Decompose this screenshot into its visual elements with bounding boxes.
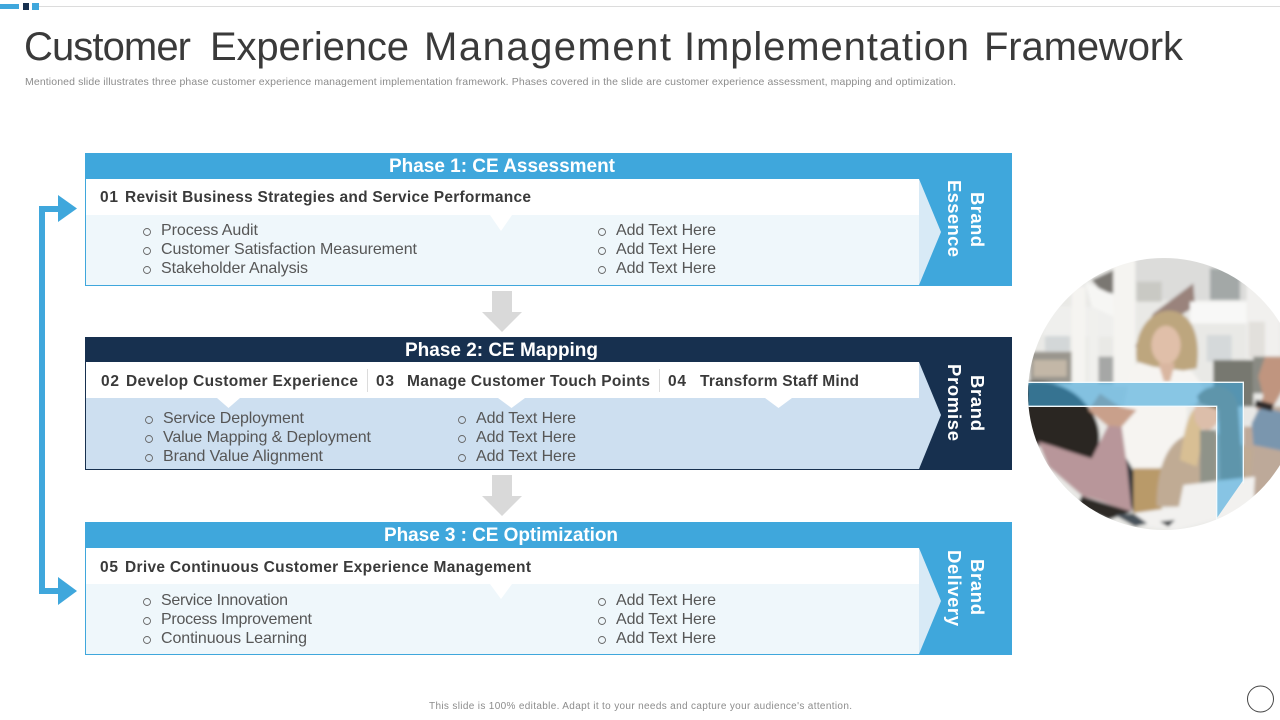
side label: brand essence: Essence bbox=[944, 180, 965, 257]
heading: phase 2: Phase 2: CE Mapping bbox=[405, 340, 598, 361]
side label: brand delivery: Delivery bbox=[944, 550, 965, 627]
title: Implementation bbox=[684, 25, 969, 69]
list: phase 1 right: Add Text Here bbox=[616, 241, 716, 258]
side label: brand promise: Brand bbox=[967, 375, 988, 431]
arrow: phase 2 to phase 3 bbox=[482, 475, 522, 516]
title bbox=[24, 25, 1184, 69]
list: phase 2 right: Add Text Here bbox=[476, 448, 576, 465]
step 04 heading: 04 bbox=[668, 373, 686, 390]
step 01 heading: 01 bbox=[100, 189, 118, 206]
title: Framework bbox=[984, 25, 1184, 69]
list: phase 1 left: Process Audit bbox=[161, 222, 259, 239]
list: phase 2 left bbox=[146, 410, 372, 465]
title: Customer bbox=[24, 25, 191, 69]
heading: phase 1: Phase 1: CE Assessment bbox=[389, 156, 616, 177]
list: phase 1 right bbox=[598, 222, 716, 277]
list: phase 2 left: Service Deployment bbox=[163, 410, 305, 427]
photo: team in circular crop bbox=[1020, 250, 1280, 537]
panel: phase 2 bbox=[86, 338, 1012, 470]
side label: brand promise: Promise bbox=[944, 364, 965, 441]
list: phase 3 left: Service Innovation bbox=[161, 592, 288, 609]
list: phase 1 left bbox=[144, 222, 418, 277]
list: phase 3 right: Add Text Here bbox=[616, 592, 716, 609]
list: phase 2 left: Value Mapping & Deployment bbox=[163, 429, 372, 446]
title: Management bbox=[424, 25, 671, 69]
step 04 heading: Transform Staff Mind bbox=[700, 373, 859, 390]
list: phase 3 left bbox=[144, 592, 313, 647]
footer note: This slide is 100% editable. Adapt it to your needs and capture your audience's attention. bbox=[429, 701, 852, 712]
list: phase 3 right: Add Text Here bbox=[616, 611, 716, 628]
step 05 heading: Drive Continuous Customer Experience Management bbox=[125, 559, 531, 576]
list: phase 3 left: Continuous Learning bbox=[161, 630, 307, 647]
list: phase 3 right: Add Text Here bbox=[616, 630, 716, 647]
side label: brand delivery: Brand bbox=[967, 559, 988, 615]
subtitle: Mentioned slide illustrates three phase customer experience management implementation framework. Phases covered in the slide are customer experience assessment, mapping and optimization. bbox=[25, 76, 956, 88]
presenter bbox=[1122, 364, 1198, 468]
top decoration bbox=[0, 3, 1280, 10]
list: phase 1 right: Add Text Here bbox=[616, 260, 716, 277]
right arm bbox=[1252, 407, 1280, 452]
panel: phase 3 bbox=[86, 522, 1012, 654]
step 03 heading: 03 bbox=[376, 373, 394, 390]
feedback loop arrow bbox=[39, 195, 77, 605]
list: phase 3 right bbox=[598, 592, 716, 647]
white frame lines bbox=[1028, 382, 1243, 483]
list: phase 2 right: Add Text Here bbox=[476, 410, 576, 427]
step 01 heading: Revisit Business Strategies and Service Performance bbox=[125, 189, 531, 206]
step 03 heading: Manage Customer Touch Points bbox=[407, 373, 650, 390]
seated woman bbox=[1157, 433, 1253, 507]
step 05 heading: 05 bbox=[100, 559, 118, 576]
page indicator circle bbox=[1248, 686, 1274, 712]
list: phase 1 left: Customer Satisfaction Measurement bbox=[161, 241, 418, 258]
panel: phase 1 bbox=[86, 154, 1012, 286]
list: phase 2 right: Add Text Here bbox=[476, 429, 576, 446]
side label: brand essence bbox=[944, 180, 988, 257]
title: Experience bbox=[210, 25, 409, 69]
left woman bbox=[1020, 381, 1099, 463]
heading: phase 3: Phase 3 : CE Optimization bbox=[384, 525, 618, 546]
step 02 heading: Develop Customer Experience bbox=[126, 373, 358, 390]
step 02 heading: 02 bbox=[101, 373, 119, 390]
blue overlay band bbox=[1028, 382, 1243, 518]
list: phase 1 left: Stakeholder Analysis bbox=[161, 260, 308, 277]
list: phase 2 left: Brand Value Alignment bbox=[163, 448, 324, 465]
list: phase 1 right: Add Text Here bbox=[616, 222, 716, 239]
list: phase 2 right bbox=[458, 410, 576, 465]
laptop and phone bbox=[1133, 495, 1254, 528]
side label: brand essence: Brand bbox=[967, 192, 988, 247]
arrow: phase 1 to phase 2 bbox=[482, 291, 522, 332]
side label: brand delivery bbox=[944, 550, 988, 627]
list: phase 3 left: Process Improvement bbox=[161, 611, 313, 628]
side label: brand promise bbox=[944, 364, 988, 441]
